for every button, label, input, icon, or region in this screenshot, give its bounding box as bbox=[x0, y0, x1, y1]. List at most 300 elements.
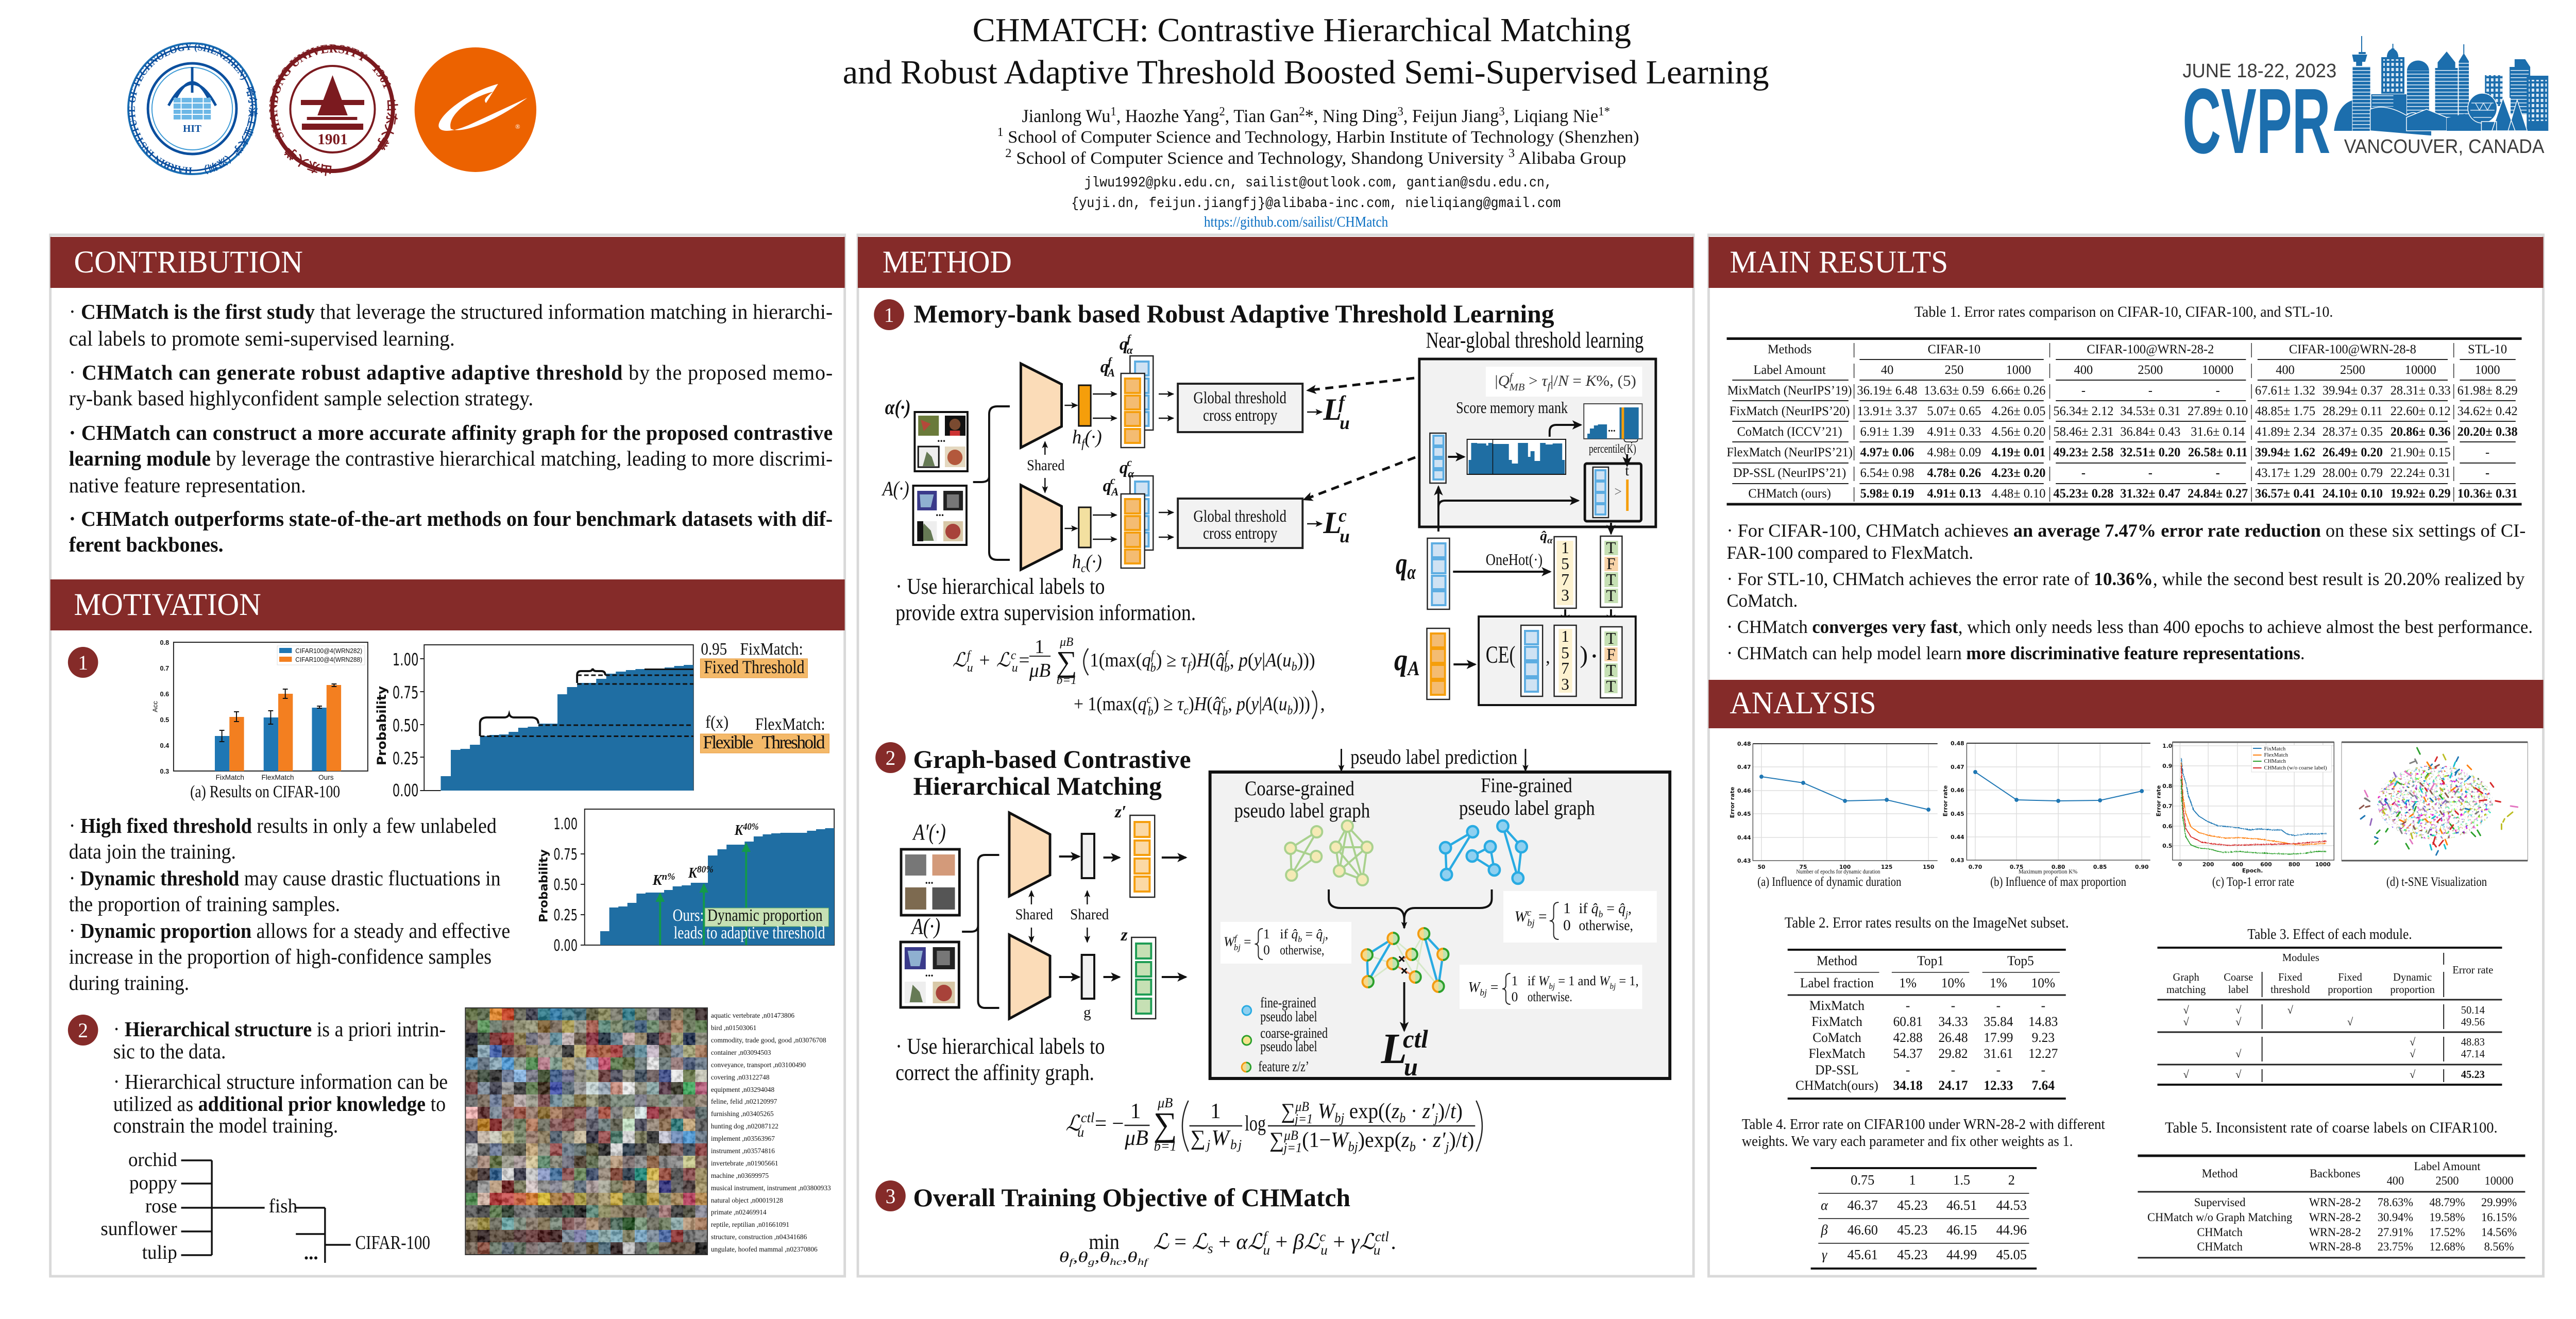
table 1: error rates: 13.91± 3.37 bbox=[1857, 404, 1918, 418]
formula: contrastive loss: W bbox=[1212, 1126, 1231, 1150]
diagram: pseudo label graphs: pseudo label graph bbox=[1234, 799, 1370, 822]
formula: threshold loss: f bbox=[1225, 649, 1229, 662]
table 3: module effects: √ bbox=[2183, 1069, 2189, 1081]
formula: threshold loss: 1(max(q bbox=[1090, 650, 1151, 671]
diagram: dual-head network: h bbox=[1072, 427, 1082, 448]
line chart: dynamic duration: 0.46 bbox=[1737, 787, 1751, 794]
line chart: max proportion: 0.85 bbox=[2093, 864, 2107, 870]
table 2: ImageNet: - bbox=[1996, 998, 2001, 1013]
cross-entropy box: ) bbox=[1580, 642, 1588, 669]
table 3: module effects: matching bbox=[2166, 984, 2206, 996]
table 1: error rates: 19.92± 0.29 bbox=[2391, 487, 2451, 501]
line chart: max proportion: 0.47 bbox=[1951, 764, 1964, 770]
caption: table 2: Table 2. Error rates results on the ImageNet subset. bbox=[1785, 915, 2069, 931]
formula: threshold loss: f bbox=[1151, 649, 1156, 662]
table 2: ImageNet: - bbox=[1996, 1063, 2001, 1077]
formula: contrastive loss: b bbox=[1410, 1139, 1416, 1154]
line chart: top-1 error: 600 bbox=[2260, 861, 2272, 868]
diagram: dual-head network: α bbox=[1128, 468, 1134, 480]
diagram: pseudo label flow: q̂ bbox=[1540, 528, 1547, 543]
image set: weak augmentation bbox=[914, 412, 968, 471]
image set: strong augmentation: ... bbox=[936, 506, 944, 519]
diagram: near-global threshold box: f bbox=[1547, 381, 1552, 392]
line chart: top-1 error: 0.7 bbox=[2162, 803, 2172, 810]
table 1: error rates: 39.94± 0.37 bbox=[2323, 384, 2383, 398]
formula: contrastive loss: ∑ bbox=[1281, 1099, 1296, 1123]
line chart: top-1 error: 0.6 bbox=[2162, 823, 2172, 830]
table 2: ImageNet: 31.61 bbox=[1984, 1046, 2013, 1061]
line chart: dynamic duration: 150 bbox=[1923, 864, 1935, 870]
formula: contrastive loss: 1 bbox=[1130, 1099, 1141, 1123]
text block: contribution bullets: ferent backbones. bbox=[69, 533, 224, 556]
formula box: coarse affinity: c bbox=[1527, 907, 1532, 918]
line chart: dynamic duration: 0.44 bbox=[1737, 834, 1751, 841]
table 1: error rates: 4.78± 0.26 bbox=[1927, 466, 1981, 480]
formula: contrastive loss: ∑ bbox=[1154, 1106, 1177, 1143]
graph legend: pseudo label bbox=[1260, 1008, 1317, 1024]
formula: threshold loss: ℒ bbox=[996, 650, 1010, 671]
table 1: error rates: - bbox=[2148, 466, 2153, 480]
category labels for image grid: hunting dog ,n02087122 bbox=[711, 1122, 778, 1130]
formula: threshold loss: , bbox=[1320, 694, 1325, 715]
pseudo label column: 7 bbox=[1561, 571, 1569, 589]
table 2: ImageNet: - bbox=[1951, 1063, 1955, 1077]
table 1: error rates: 2500 bbox=[2138, 363, 2163, 377]
diagram: pseudo label flow: q bbox=[1396, 546, 1411, 580]
table 4: loss weights: 1 bbox=[1909, 1172, 1916, 1188]
labels: fixmatch threshold bbox=[700, 640, 807, 678]
line chart: dynamic duration: 0.45 bbox=[1737, 811, 1751, 817]
table 1: error rates bbox=[1726, 339, 2522, 504]
table 1: error rates: 5.07± 0.65 bbox=[1927, 404, 1981, 418]
step chart: dynamic proportion: Dynamic proportion bbox=[707, 906, 823, 925]
step chart: dynamic proportion: 0.25 bbox=[553, 906, 578, 924]
logo: Shandong University: 1901 bbox=[317, 131, 348, 148]
formula: contrastive loss: exp(( bbox=[1344, 1099, 1392, 1123]
mask column bbox=[1600, 536, 1622, 607]
section heading 3: Overall Training Objective of CHMatch bbox=[913, 1183, 1350, 1212]
formula: threshold loss: ) bbox=[1189, 694, 1194, 715]
chart legend bbox=[2251, 745, 2331, 772]
caption: chart b: (b) Influence of max proportion bbox=[1990, 875, 2126, 889]
table 4: loss weights: 45.61 bbox=[1848, 1247, 1878, 1262]
image set: weak augmentation: ... bbox=[937, 432, 945, 444]
cross-entropy box: , bbox=[1546, 646, 1550, 667]
line chart: max proportion: 0.70 bbox=[1969, 864, 1982, 870]
line chart: top-1 error: Error rate bbox=[2155, 785, 2162, 816]
image grid: ImageNet subset mosaic bbox=[465, 1008, 707, 1255]
category labels for image grid: container ,n03094503 bbox=[711, 1049, 771, 1056]
formula: contrastive loss: )/ bbox=[1449, 1128, 1462, 1152]
bar chart: results on CIFAR-100: 0.3 bbox=[160, 767, 169, 775]
formula box: coarse affinity: = bbox=[1535, 909, 1547, 925]
formula: threshold loss: c bbox=[1011, 649, 1016, 662]
category labels for image grid: instrument ,n03574816 bbox=[711, 1147, 775, 1155]
table 2: ImageNet: 14.83 bbox=[2028, 1014, 2058, 1029]
badge 1: 1 bbox=[78, 652, 88, 674]
table 4: loss weights: 0.75 bbox=[1851, 1172, 1874, 1188]
formula: contrastive loss: ctl bbox=[1081, 1110, 1094, 1125]
logo: Harbin Institute of Technology: HIT bbox=[183, 123, 201, 134]
formula box: final affinity: = 1, bbox=[1616, 973, 1639, 988]
formula: contrastive loss: μB bbox=[1157, 1095, 1173, 1110]
formula: contrastive loss: j bbox=[1205, 1137, 1210, 1152]
table 3: module effects: Coarse bbox=[2224, 972, 2253, 983]
table 2: ImageNet: - bbox=[2041, 1063, 2045, 1077]
formula: threshold loss: 1 bbox=[1035, 637, 1044, 658]
text block: threshold bullets: · Dynamic proportion allows for a steady and effective bbox=[69, 919, 510, 943]
heading: main results bbox=[1708, 237, 2544, 288]
formula box: fine affinity: = bbox=[1241, 934, 1251, 949]
affiliations: School of Computer Science and Technology, Shandong University bbox=[1012, 149, 1509, 168]
table 5: inconsistent rate: 30.94% bbox=[2378, 1211, 2413, 1224]
diagram: dual-head network: c bbox=[1127, 456, 1132, 469]
table 5: inconsistent rate: 14.56% bbox=[2481, 1226, 2517, 1239]
table 5: inconsistent rate: Supervised bbox=[2194, 1196, 2246, 1209]
diagram: dual-head network: q bbox=[1120, 335, 1128, 354]
formula: threshold loss: ℒ bbox=[953, 650, 966, 671]
formula: threshold loss: H(q̂ bbox=[1196, 650, 1225, 671]
formula: threshold loss bbox=[953, 636, 1325, 719]
formula box: final affinity: 1 bbox=[1512, 973, 1518, 988]
text block: contribution bullets: native feature representation. bbox=[69, 474, 306, 497]
table 3: module effects: 49.56 bbox=[2461, 1017, 2485, 1028]
heading: analysis: ANALYSIS bbox=[1730, 686, 1876, 721]
logo: CVPR 2023: VANCOUVER, CANADA bbox=[2344, 135, 2544, 157]
formula: contrastive loss: = − bbox=[1095, 1111, 1124, 1135]
line chart: dynamic duration: 50 bbox=[1757, 864, 1766, 870]
table 3: module effects: √ bbox=[2287, 1005, 2294, 1016]
chart legend bbox=[277, 646, 365, 665]
table 4: loss weights: 45.23 bbox=[1897, 1197, 1928, 1213]
table 5: inconsistent rate: 16.15% bbox=[2481, 1211, 2517, 1224]
formula: contrastive loss: bj bbox=[1334, 1110, 1344, 1125]
table 1: error rates: CIFAR-100@WRN-28-8 bbox=[2289, 342, 2416, 356]
table 5: inconsistent rate: 27.91% bbox=[2378, 1226, 2413, 1239]
formula box: coarse affinity: if q̂ bbox=[1579, 900, 1599, 917]
table 5: inconsistent rate: CHMatch bbox=[2197, 1226, 2243, 1239]
cross-entropy box: CE( bbox=[1486, 642, 1515, 669]
line chart: max proportion: 0.48 bbox=[1951, 740, 1964, 747]
diagram: dual-head network: q bbox=[1120, 458, 1128, 477]
loss labels: L bbox=[1323, 392, 1342, 426]
bar chart: results on CIFAR-100: 0.6 bbox=[160, 690, 169, 698]
strong-view column bbox=[1427, 628, 1449, 699]
section heading 2: Graph-based Contrastive bbox=[913, 745, 1191, 774]
diagram: dual-head network: f bbox=[1108, 355, 1113, 368]
table 1: error rates: 61.98± 8.29 bbox=[2458, 384, 2518, 398]
formula: threshold loss: H(q̂ bbox=[1194, 694, 1222, 715]
diagram: near-global threshold box: |Q bbox=[1495, 373, 1509, 389]
table 1: error rates: 10000 bbox=[2405, 363, 2436, 377]
caption: table 4: weights. We vary each parameter and fix other weights as 1. bbox=[1742, 1133, 2073, 1150]
table 5: inconsistent rate: 48.79% bbox=[2429, 1196, 2465, 1209]
category labels for image grid: natural object ,n00019128 bbox=[711, 1196, 783, 1204]
line chart: dynamic duration bbox=[1729, 741, 1938, 875]
line chart: dynamic duration: Error rate bbox=[1729, 787, 1736, 818]
caption: table 4: Table 4. Error rate on CIFAR100 under WRN-28-2 with different bbox=[1742, 1116, 2105, 1133]
formula: threshold loss: ∑ bbox=[1056, 645, 1077, 678]
formula box: coarse affinity: otherwise, bbox=[1579, 917, 1633, 934]
authors: 2 bbox=[1299, 105, 1305, 118]
formula: overall objective: min bbox=[1089, 1230, 1120, 1254]
text block: contribution bullets: ry-bank based highlyconfident sample selection strategy. bbox=[69, 387, 533, 410]
logo: Alibaba bbox=[415, 47, 536, 172]
category labels for image grid: ungulate, hoofed mammal ,n02370806 bbox=[711, 1245, 818, 1253]
caption: table 4 bbox=[1742, 1116, 2105, 1150]
diagram: contrastive encoder: z′ bbox=[1114, 802, 1126, 821]
formula: overall objective: u bbox=[1320, 1242, 1328, 1258]
line chart: dynamic duration: 0.48 bbox=[1737, 741, 1751, 747]
heading: near-global threshold learning: Near-global threshold learning bbox=[1426, 328, 1643, 353]
formula box: final affinity: bj bbox=[1480, 987, 1487, 998]
formula box: fine affinity: if q̂ bbox=[1280, 927, 1298, 941]
formula: overall objective: u bbox=[1374, 1242, 1380, 1258]
diagram: near-global threshold box: MB bbox=[1509, 382, 1524, 393]
encoder trapezoids bbox=[1021, 364, 1062, 570]
tree diagram: label hierarchy: rose bbox=[145, 1196, 177, 1217]
diagram: contrastive encoder: z bbox=[1121, 926, 1128, 945]
table 2: ImageNet: 26.48 bbox=[1938, 1030, 1968, 1045]
formula: threshold loss: + 1(max(q bbox=[1074, 694, 1147, 715]
text block: results bullets: CoMatch. bbox=[1727, 590, 1798, 611]
sorted score chart: ... bbox=[1608, 423, 1616, 434]
category labels for image grid: furnishing ,n03405265 bbox=[711, 1110, 774, 1118]
loss label: u bbox=[1404, 1052, 1418, 1081]
table 5: inconsistent rate: 10000 bbox=[2485, 1174, 2514, 1187]
diagram: pseudo label flow: α bbox=[1407, 561, 1416, 584]
line chart: max proportion: Error rate bbox=[1942, 785, 1948, 816]
section heading 3: 3 bbox=[886, 1185, 895, 1208]
line chart: top-1 error bbox=[2155, 742, 2334, 874]
graph legend bbox=[1242, 995, 1328, 1074]
text block: hierarchical labels 2: · Use hierarchical labels to bbox=[895, 1034, 1105, 1059]
table 1: error rates: FlexMatch (NeurIPS’21) bbox=[1726, 446, 1853, 459]
formula box: fine affinity: W bbox=[1224, 934, 1234, 949]
authors: , Feijun Jiang bbox=[1403, 106, 1499, 126]
formula: threshold loss: b bbox=[1148, 705, 1154, 718]
cross-entropy box: 1 bbox=[1561, 627, 1569, 645]
formula: contrastive loss: u bbox=[1077, 1124, 1084, 1140]
table 2: ImageNet: 42.88 bbox=[1893, 1030, 1923, 1045]
table 2: ImageNet: 60.81 bbox=[1893, 1014, 1923, 1029]
threshold comparison box: t bbox=[1625, 462, 1629, 478]
line chart: top-1 error: 400 bbox=[2232, 861, 2243, 868]
diagram: dual-head network: q bbox=[1100, 357, 1109, 376]
cross-entropy box: 7 bbox=[1561, 659, 1569, 677]
cross-entropy box: T bbox=[1606, 677, 1616, 695]
authors: 3 bbox=[1397, 105, 1403, 118]
table 3: module effects: Fixed bbox=[2278, 972, 2302, 983]
tree diagram: label hierarchy: orchid bbox=[128, 1150, 177, 1171]
step chart: dynamic proportion: 1.00 bbox=[553, 815, 578, 833]
mask column: T bbox=[1606, 571, 1616, 589]
formula: threshold loss: b bbox=[1224, 661, 1230, 675]
formula box: fine affinity: q̂ bbox=[1316, 927, 1323, 941]
tree diagram: label hierarchy: poppy bbox=[129, 1173, 177, 1194]
table 4: loss weights: 46.15 bbox=[1946, 1222, 1977, 1238]
table 1: error rates: 26.58± 0.11 bbox=[2188, 446, 2248, 459]
table 1: error rates: 34.62± 0.42 bbox=[2458, 404, 2518, 418]
text block: contribution bullets: · CHMatch is the first study that leverage the structured information matching in hierarchi- bbox=[69, 300, 833, 323]
diagram: contrastive encoder bbox=[901, 802, 1186, 1021]
table 1: error rates: 22.24± 0.31 bbox=[2391, 466, 2451, 480]
table 1: error rates: STL-10 bbox=[2468, 342, 2507, 356]
logo: CVPR 2023 bbox=[2182, 36, 2548, 173]
heading: motivation bbox=[50, 579, 845, 630]
merge brace bbox=[1329, 889, 1492, 928]
formula: threshold loss: p(y|A(u bbox=[1239, 650, 1292, 671]
text block: contribution bullets: · CHMatch can generate robust adaptive adaptive threshold by the proposed memo- bbox=[69, 361, 833, 384]
formula box: final affinity: 0 bbox=[1512, 989, 1518, 1004]
bar chart: results on CIFAR-100: 0.7 bbox=[160, 664, 169, 672]
formula: contrastive loss: log bbox=[1245, 1111, 1266, 1135]
threshold comparison box: > bbox=[1614, 484, 1622, 499]
formula box: coarse affinity: bj bbox=[1527, 918, 1535, 929]
table 1: error rates: 4.56± 0.20 bbox=[1992, 425, 2045, 439]
table 4: loss weights: 45.23 bbox=[1897, 1222, 1928, 1238]
category labels for image grid: machine ,n03699975 bbox=[711, 1172, 769, 1179]
category labels for image grid: commodity, trade good, good ,n03076708 bbox=[711, 1036, 826, 1044]
authors: *, Ning Ding bbox=[1305, 106, 1398, 126]
diagram: dual-head network: c bbox=[1338, 505, 1347, 526]
diagram: pseudo label graphs: Coarse-grained bbox=[1245, 777, 1354, 800]
table 2: ImageNet: 24.17 bbox=[1938, 1078, 1968, 1093]
formula: threshold loss: ) bbox=[1191, 650, 1196, 671]
diagram: contrastive encoder: A(·) bbox=[910, 914, 940, 939]
formula box: coarse affinity: 1 bbox=[1563, 900, 1571, 917]
formula: contrastive loss bbox=[1065, 1095, 1482, 1155]
table 1: error rates: 4.26± 0.05 bbox=[1992, 404, 2045, 418]
line chart: max proportion: 0.45 bbox=[1951, 811, 1964, 817]
table 2: ImageNet: FixMatch bbox=[1811, 1014, 1862, 1029]
text block: contribution bullets: · CHMatch outperforms state-of-the-art methods on four benchmark datasets with dif- bbox=[69, 507, 833, 530]
table 1: error rates: CIFAR-100@WRN-28-2 bbox=[2087, 342, 2214, 356]
category labels for image grid bbox=[711, 1012, 831, 1253]
table 5: inconsistent rate: 400 bbox=[2387, 1174, 2404, 1187]
authors: 1* bbox=[1598, 105, 1610, 118]
category labels for image grid: conveyance, transport ,n03100490 bbox=[711, 1061, 806, 1069]
table 3: module effects: √ bbox=[2235, 1069, 2242, 1081]
formula box: coarse affinity: W bbox=[1514, 909, 1527, 925]
formula: contrastive loss: z′ bbox=[1422, 1099, 1435, 1123]
table 2: ImageNet: 34.33 bbox=[1938, 1014, 1968, 1029]
table 3: module effects: Dynamic bbox=[2393, 972, 2432, 983]
diagram: dual-head network: cross entropy bbox=[1203, 524, 1278, 543]
formula: threshold loss: μB bbox=[1059, 636, 1073, 649]
affiliations bbox=[997, 126, 1639, 168]
emails: {yuji.dn, feijun.jiangfj}@alibaba-inc.com, nieliqiang@gmail.com bbox=[1071, 196, 1561, 212]
table 1: error rates: 28.31± 0.33 bbox=[2391, 384, 2451, 398]
table 1: error rates: 58.46± 2.31 bbox=[2053, 425, 2113, 439]
diagram: dual-head network: c bbox=[1081, 562, 1086, 575]
formula: overall objective: βℒ bbox=[1293, 1230, 1320, 1254]
diagram: near-global threshold box: N = K%, (5) bbox=[1558, 373, 1634, 389]
formula: contrastive loss: b=1 bbox=[1154, 1138, 1177, 1154]
table 3: module effects: label bbox=[2228, 984, 2249, 996]
table 1: error rates: 31.6± 0.14 bbox=[2191, 425, 2245, 439]
title: CHMATCH: Contrastive Hierarchical Matching bbox=[973, 11, 1631, 49]
authors: , Tian Gan bbox=[1225, 106, 1299, 126]
formula: contrastive loss: j bbox=[1444, 1139, 1449, 1154]
formula: contrastive loss: μB bbox=[1124, 1126, 1148, 1150]
category labels for image grid: bird ,n01503061 bbox=[711, 1024, 756, 1032]
bar chart: results on CIFAR-100: Acc bbox=[151, 701, 159, 712]
section heading 1: Memory-bank based Robust Adaptive Threshold Learning bbox=[913, 299, 1554, 328]
table 3: module effects: 48.83 bbox=[2461, 1037, 2485, 1048]
diagram: dual-head network: Global threshold bbox=[1193, 507, 1286, 526]
bar chart: results on CIFAR-100: Ours bbox=[318, 773, 334, 781]
table 2: ImageNet: 12.33 bbox=[1984, 1078, 2013, 1093]
text block: results bullets: · CHMatch converges very fast, which only needs less than 400 epochs to achieve almost the best performance. bbox=[1727, 616, 2533, 637]
formula box: coarse affinity: 0 bbox=[1563, 917, 1571, 934]
formula: threshold loss: μB bbox=[1029, 660, 1050, 681]
cross-entropy box bbox=[1479, 616, 1636, 705]
formula box: fine affinity: bj bbox=[1234, 943, 1241, 952]
table 4: loss weights: 45.05 bbox=[1996, 1247, 2027, 1262]
formula: contrastive loss: W bbox=[1331, 1128, 1350, 1152]
diagram: dual-head network: α(·) bbox=[885, 396, 911, 419]
section heading 2: Hierarchical Matching bbox=[913, 772, 1162, 800]
formula: threshold loss: ) ≥ bbox=[1156, 650, 1181, 671]
formula: contrastive loss: μB bbox=[1283, 1128, 1298, 1143]
formula: threshold loss: u bbox=[1012, 661, 1018, 675]
formula: overall objective: + bbox=[1270, 1230, 1293, 1254]
formula: threshold loss: + bbox=[974, 650, 995, 671]
formula box: fine affinity: b bbox=[1298, 935, 1302, 944]
formula: overall objective: g bbox=[1088, 1257, 1095, 1267]
step chart: dynamic proportion: K bbox=[735, 822, 744, 838]
loss labels: u bbox=[1340, 413, 1350, 433]
diagram: contrastive encoder: g bbox=[1083, 1004, 1091, 1021]
caption: chart a: (a) Influence of dynamic duration bbox=[1757, 875, 1901, 889]
diagram: pseudo label graphs bbox=[1210, 772, 1670, 1081]
line chart: dynamic duration: 125 bbox=[1881, 864, 1892, 870]
formula box: fine affinity bbox=[1221, 922, 1351, 964]
diagram: dual-head network: A bbox=[1107, 367, 1115, 379]
table 1: error rates: MixMatch (NeurIPS’19) bbox=[1727, 384, 1852, 398]
formula: threshold loss: f bbox=[1188, 660, 1192, 674]
table 1: error rates: 4.23± 0.20 bbox=[1992, 466, 2045, 480]
table 3: module effects: √ bbox=[2347, 1017, 2353, 1028]
table 1: error rates: 39.94± 1.62 bbox=[2255, 446, 2315, 459]
formula box: fine affinity: f bbox=[1234, 933, 1238, 943]
diagram: contrastive encoder: ... bbox=[925, 967, 934, 979]
global threshold boxes: cross entropy bbox=[1203, 406, 1278, 425]
diagram: dual-head network: Shared bbox=[1027, 457, 1065, 474]
table 5: inconsistent rate: 2500 bbox=[2436, 1174, 2459, 1187]
text block: contribution bullets: · CHMatch can construct a more accurate affinity graph for the proposed contrastive bbox=[69, 421, 833, 444]
step chart: dynamic proportion: leads to adaptive threshold bbox=[674, 923, 825, 943]
table 1: error rates: 36.84± 0.43 bbox=[2120, 425, 2180, 439]
table 5: inconsistent rate: WRN-28-8 bbox=[2309, 1240, 2361, 1253]
table 5: inconsistent rate: 19.58% bbox=[2429, 1211, 2465, 1224]
emails: jlwu1992@pku.edu.cn, sailist@outlook.com, gantian@sdu.edu.cn, bbox=[1084, 175, 1552, 191]
text block: hierarchical structure bbox=[113, 1018, 448, 1137]
cross-entropy box: T bbox=[1606, 629, 1616, 647]
brace: large threshold gap bbox=[480, 714, 538, 736]
table 1: error rates: 67.61± 1.32 bbox=[2255, 384, 2315, 398]
heading: method bbox=[858, 237, 1693, 288]
heading: main results: MAIN RESULTS bbox=[1730, 245, 1948, 280]
bar chart: results on CIFAR-100: FlexMatch bbox=[262, 773, 294, 781]
line chart: top-1 error: 200 bbox=[2202, 861, 2214, 868]
formula: threshold loss: ))) bbox=[1297, 650, 1315, 671]
table 2: ImageNet: 35.84 bbox=[1984, 1014, 2013, 1029]
table 1: error rates: 13.63± 0.59 bbox=[1924, 384, 1985, 398]
table 1: error rates: FixMatch (NeurIPS’20) bbox=[1730, 404, 1850, 418]
formula: overall objective: ,θ bbox=[1095, 1249, 1110, 1265]
